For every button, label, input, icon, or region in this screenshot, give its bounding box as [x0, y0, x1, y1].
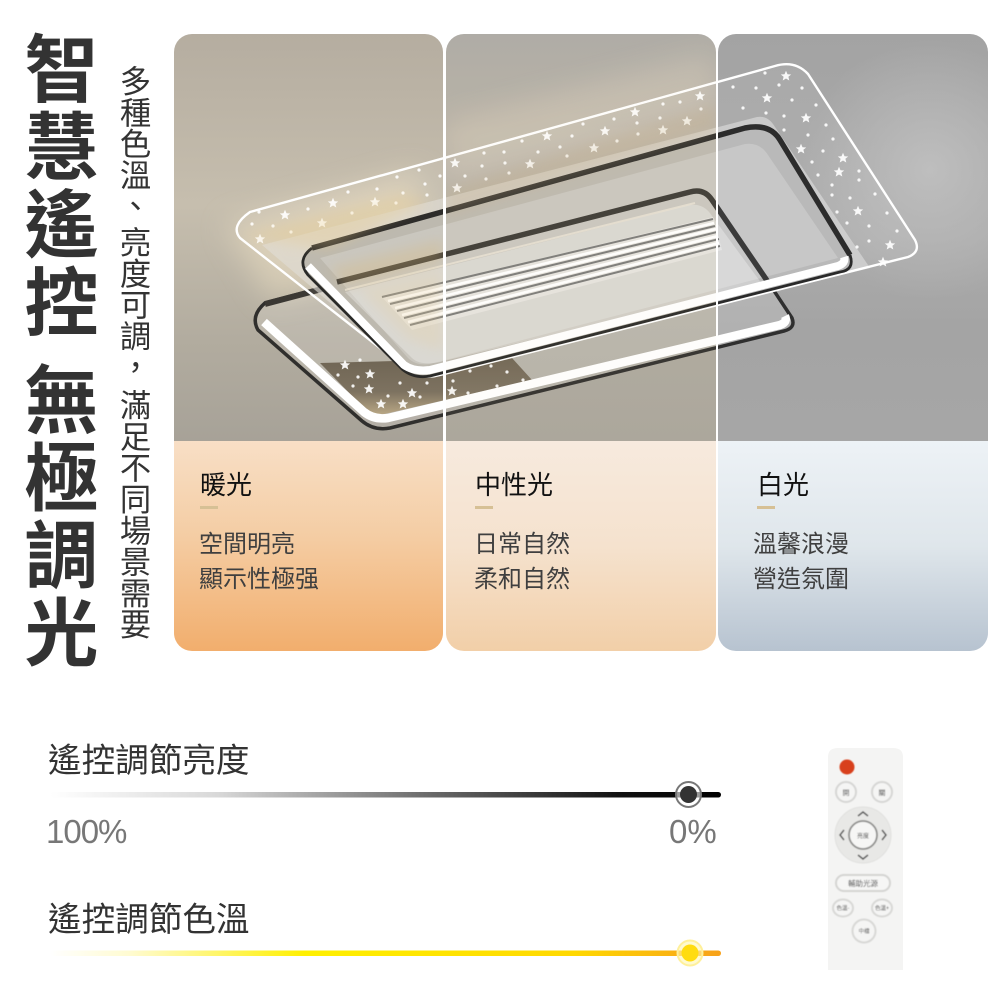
panel: warm light: [174, 441, 443, 651]
text: neutral description: [474, 524, 570, 594]
heading: white: 白光: [757, 465, 809, 502]
photo panel: white: [718, 34, 988, 441]
on and off buttons: [836, 782, 892, 802]
text: warm description: 空間明亮: [199, 524, 295, 559]
dash: warm: [200, 506, 218, 508]
dash: white: [757, 506, 775, 508]
heading: warm: 暖光: [200, 465, 252, 502]
dash: neutral: [475, 506, 493, 508]
icon: remote control: 輔助光源: [848, 878, 878, 889]
text: neutral description: 柔和自然: [474, 558, 570, 594]
slider: brightness: [85, 781, 721, 808]
icon: remote control: 色溫-: [837, 904, 850, 912]
icon: remote control: 色溫+: [875, 904, 889, 912]
panel: white light: [718, 441, 988, 651]
text: white description: 營造氛圍: [753, 558, 849, 594]
power button: [840, 760, 854, 774]
photo panel: neutral: [446, 34, 716, 441]
text: warm description: 顯示性極强: [199, 558, 319, 594]
photo: ceiling fan lamp shown in three colour temperatures: [174, 34, 988, 441]
icon: remote control: 關: [878, 788, 886, 798]
direction dial: [835, 807, 891, 863]
subtitle: vertical description: 多種色溫 、 亮度可調 ， 滿足不同場景需要: [113, 65, 158, 639]
label: 100%: 100%: [46, 813, 126, 850]
heading: neutral: 中性光: [475, 465, 553, 502]
title: vertical main heading: 智慧遙控 無極調光: [8, 31, 115, 672]
label: 0%: 0%: [669, 813, 717, 850]
text: warm description: [199, 524, 319, 594]
text: white description: 溫馨浪漫: [753, 524, 849, 559]
temperature and mode buttons: [833, 900, 892, 942]
photo panel: warm: [174, 34, 443, 441]
heading: brightness control: 遙控調節亮度: [48, 733, 249, 782]
slider: colour temperature: [64, 940, 721, 966]
text: white description: [753, 524, 849, 594]
icon: remote control: [828, 748, 903, 970]
heading: colour temperature control: 遙控調節色溫: [48, 892, 249, 941]
text: neutral description: 日常自然: [474, 524, 570, 559]
icon: remote control: 開: [842, 788, 850, 798]
icon: remote control: 亮度: [857, 831, 869, 840]
panel: neutral light: [446, 441, 716, 651]
icon: remote control: 中檔: [858, 927, 870, 935]
auxiliary light button: [836, 875, 890, 891]
